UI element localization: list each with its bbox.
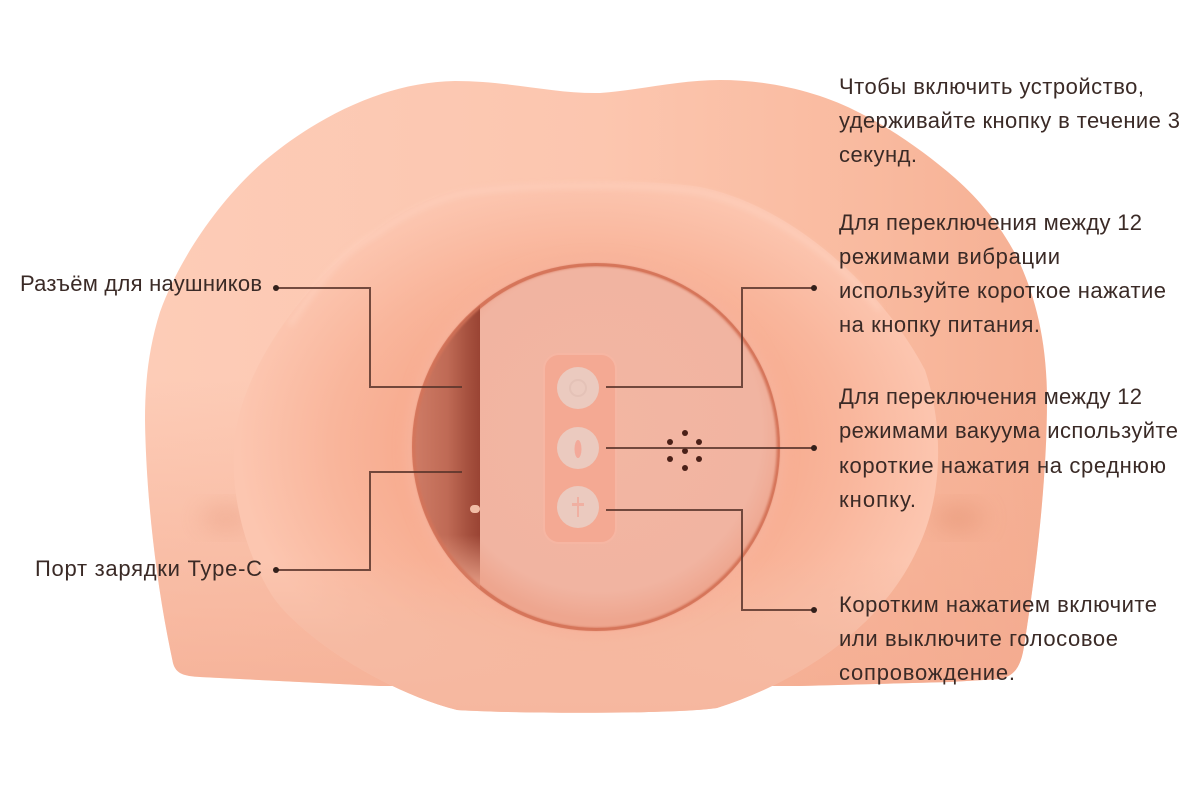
- icon: voice button: [557, 486, 599, 528]
- text block: vacuum modes: Для переключения между 12: [839, 384, 1142, 409]
- label: headphone jack: Разъём для наушников: [20, 271, 262, 296]
- text block: voice prompts: или выключите голосовое: [839, 626, 1118, 651]
- text block: vibration modes: на кнопку питания.: [839, 312, 1040, 337]
- text block: power on: Чтобы включить устройство,: [839, 74, 1144, 99]
- leader: Type-C port: [273, 472, 462, 573]
- icon: speaker holes: [667, 430, 702, 471]
- text block: power on: удерживайте кнопку в течение 3: [839, 108, 1180, 133]
- icon: power button: [557, 367, 599, 409]
- leader: power button: [606, 285, 817, 387]
- text block: vibration modes: используйте короткое нажатие: [839, 278, 1166, 303]
- leader: headphone jack: [273, 285, 462, 387]
- text block: power on: секунд.: [839, 142, 917, 167]
- text block: vacuum modes: короткие нажатия на среднюю: [839, 453, 1166, 478]
- text block: voice prompts: Коротким нажатием включите: [839, 592, 1157, 617]
- text block: vacuum modes: режимами вакуума используйте: [839, 418, 1178, 443]
- leader: vacuum button: [606, 445, 817, 451]
- body crease left: [200, 506, 252, 530]
- icon: vacuum button: [557, 427, 599, 469]
- control disc: [405, 257, 786, 637]
- body crease right: [932, 506, 984, 530]
- text block: vibration modes: [839, 210, 1166, 337]
- text block: vacuum modes: кнопку.: [839, 487, 916, 512]
- ring highlight: [290, 186, 880, 325]
- device body: [145, 80, 1047, 686]
- text block: voice prompts: [839, 592, 1157, 685]
- button panel: [544, 354, 616, 543]
- label: Type-C port: Порт зарядки Type-C: [35, 556, 262, 581]
- cavity with ports: [416, 306, 480, 588]
- text block: vacuum modes: [839, 384, 1178, 512]
- text block: vibration modes: Для переключения между 12: [839, 210, 1142, 235]
- text block: voice prompts: сопровождение.: [839, 660, 1015, 685]
- leader: voice button: [606, 510, 817, 613]
- text block: power on: [839, 74, 1180, 167]
- soft outer ring: [234, 181, 938, 713]
- text block: vibration modes: режимами вибрации: [839, 244, 1060, 269]
